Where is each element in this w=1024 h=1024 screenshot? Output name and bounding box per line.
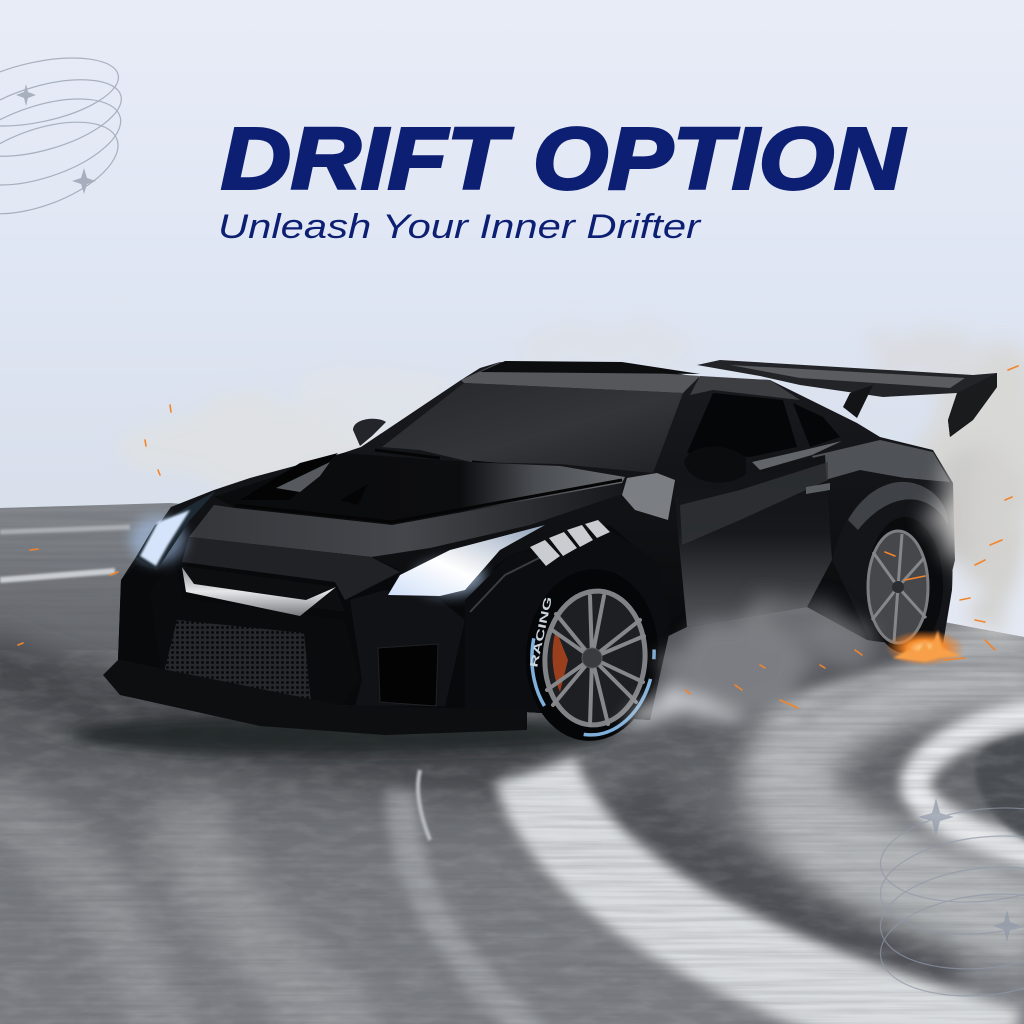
fender stripes — [530, 520, 610, 566]
underbody shadow and dark smoke behind car — [640, 610, 950, 730]
nose panel — [182, 537, 400, 600]
fog vent — [378, 644, 438, 706]
car main body — [118, 362, 955, 720]
rear spoiler — [697, 360, 997, 437]
road surface — [0, 500, 1024, 1024]
side windows — [687, 393, 842, 470]
mesh lower grille — [162, 620, 311, 703]
shoulder reflection — [812, 440, 950, 482]
mirrors — [353, 419, 386, 446]
smoke clouds behind car — [120, 325, 1024, 580]
decorative orbit rings top left — [0, 46, 131, 232]
subtitle: Unleash Your Inner Drifter — [218, 208, 702, 246]
hood lower section — [189, 483, 622, 557]
contact shadow — [70, 715, 610, 755]
fender body and wheel arch — [465, 530, 672, 720]
road texture — [0, 500, 1024, 1024]
wheel smoke — [640, 445, 1024, 721]
A-pillar patch — [622, 473, 675, 520]
front splitter — [103, 660, 527, 735]
dark asphalt patch — [975, 735, 1024, 842]
tire lettering: RACING — [528, 596, 555, 669]
fire and sparks — [18, 366, 1018, 708]
windshield — [382, 383, 683, 473]
hood vents — [240, 453, 368, 505]
rear fender — [832, 478, 953, 650]
grille opening and chrome strip — [182, 566, 345, 616]
roof — [461, 361, 800, 400]
door handle — [806, 483, 830, 494]
left headlight — [130, 491, 216, 570]
title: DRIFT OPTION — [221, 110, 906, 208]
background sky — [0, 0, 1024, 520]
wiper and cowl details — [375, 450, 560, 470]
front fascia — [118, 525, 672, 720]
front wheel — [520, 565, 664, 745]
rear wheel — [867, 517, 943, 653]
hood top section — [214, 453, 625, 525]
door panel — [673, 455, 832, 627]
right headlight — [388, 525, 545, 596]
decorative orbit rings bottom right — [875, 798, 1024, 1006]
car — [70, 360, 997, 755]
